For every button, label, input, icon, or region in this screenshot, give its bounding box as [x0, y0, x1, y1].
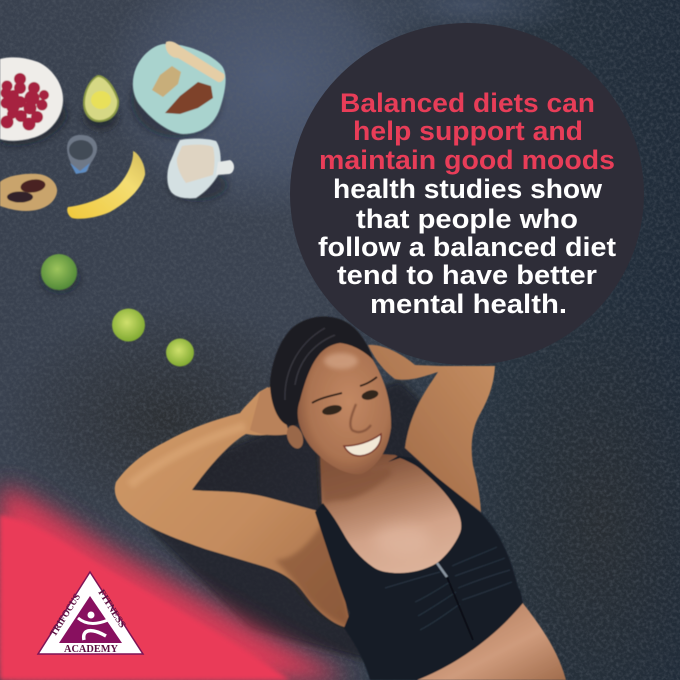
heading: pink text: help support and [353, 116, 583, 146]
food arrangement [0, 41, 234, 367]
food: plate with spices and pestle [131, 41, 226, 138]
face [298, 343, 391, 474]
food: avocado half [83, 75, 119, 130]
body: white text: follow a balanced diet [318, 232, 616, 262]
logo text: TRIFOCUS [48, 592, 83, 639]
heading: pink text [319, 88, 615, 175]
eyes and brows [312, 377, 379, 416]
logo figure [78, 612, 108, 640]
hair strand highlights [285, 328, 335, 400]
body: white text: tend to have better [337, 260, 598, 290]
floor shadow around woman [150, 380, 500, 670]
body: white text: that people who [356, 204, 578, 234]
smile [344, 434, 381, 456]
body: white text: health studies show [333, 174, 603, 204]
bra zipper [437, 563, 473, 640]
hair [270, 316, 374, 426]
ear [284, 423, 306, 451]
neck [320, 452, 392, 503]
belly [417, 602, 566, 680]
food: bowl of raspberries [0, 57, 68, 146]
food: medium lime [112, 308, 145, 342]
forehead highlight [324, 353, 358, 369]
forearm highlight [130, 426, 245, 485]
logo text: ACADEMY [64, 644, 119, 655]
bra ruching [385, 547, 512, 630]
pink gradient corner [0, 486, 350, 680]
nose shading [350, 404, 371, 432]
food: banana [67, 151, 145, 219]
black sports bra [315, 456, 523, 680]
logo text: FITNESS [95, 588, 128, 630]
logo: Trifocus Fitness Academy triangle [38, 572, 143, 655]
chest highlight [374, 524, 430, 556]
chest and neck [320, 450, 465, 590]
woman lying on the floor [115, 316, 566, 680]
hand behind head [250, 386, 290, 435]
food: milk jug [167, 139, 234, 201]
body: white text [318, 174, 616, 319]
food: small lime [166, 338, 194, 366]
callout: dark circle with message [290, 23, 644, 365]
food: wooden spoon with dates [0, 174, 57, 211]
logo text [48, 588, 128, 655]
body: white text: mental health. [370, 289, 567, 319]
left arm and shoulder [115, 387, 351, 628]
food: glass shot [67, 135, 97, 174]
armpit shading [275, 520, 350, 626]
right arm raised behind head [368, 345, 495, 512]
heading: pink text: Balanced diets can [340, 88, 595, 118]
heading: pink text: maintain good moods [319, 145, 615, 175]
food: large lime [40, 254, 80, 294]
